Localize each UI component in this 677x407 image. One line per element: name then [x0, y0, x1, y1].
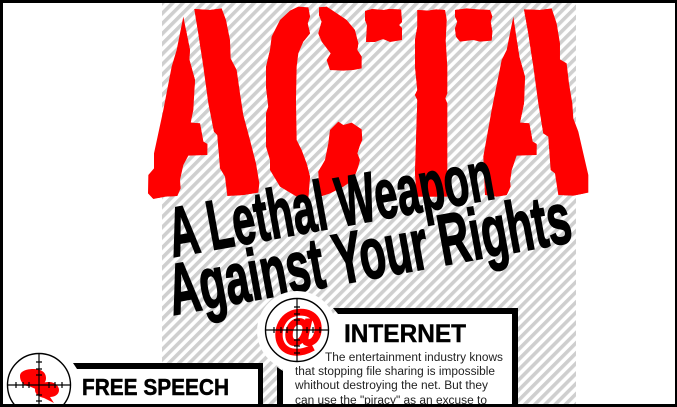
panel: free speech — [1, 347, 263, 407]
icon: free speech target — [1, 347, 77, 407]
text block: internet description: can use the "piracy" as an excuse to — [295, 395, 487, 407]
icon: internet target: @ — [274, 301, 323, 357]
text block: internet description: whithout destroying the net. But they — [294, 380, 488, 392]
striped background panel — [162, 0, 576, 407]
icon: internet target — [257, 291, 337, 371]
panel: internet — [257, 291, 518, 407]
text block: internet description — [294, 352, 503, 407]
heading: free speech: FREE SPEECH — [82, 374, 229, 400]
title: ACTA — [148, 6, 588, 199]
text block: internet description: that stopping file sharing is impossible — [295, 366, 495, 378]
heading: internet: INTERNET — [344, 320, 466, 348]
text block: internet description: The entertainment industry knows — [325, 352, 503, 364]
